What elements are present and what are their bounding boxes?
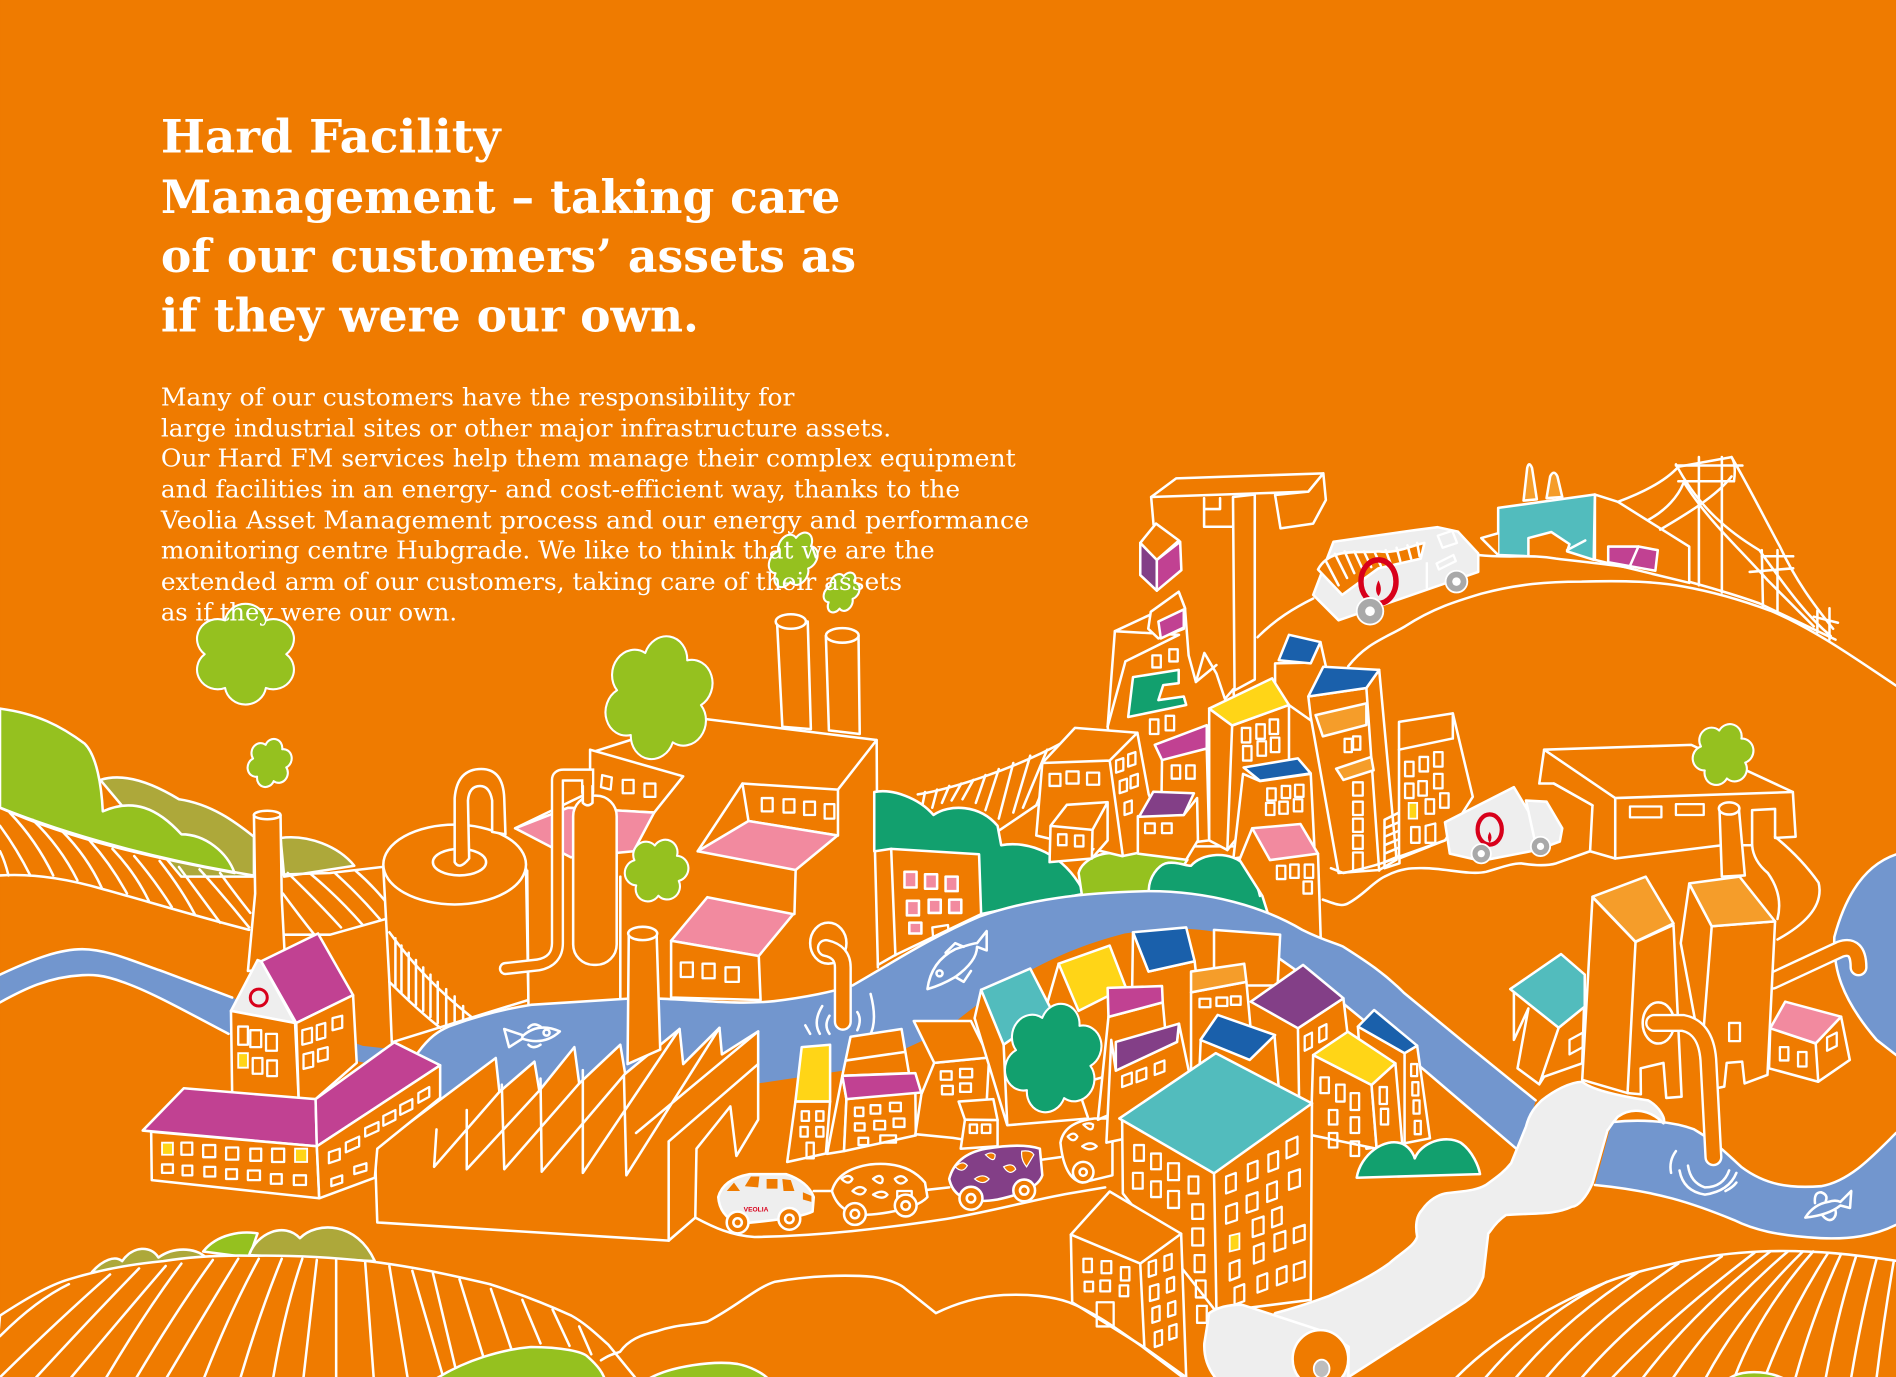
paper roll: [1204, 1305, 1349, 1377]
body text: as if they were our own.: [161, 598, 457, 626]
furrows: [0, 1259, 591, 1377]
yellow roof block: [1209, 705, 1289, 850]
heading: [161, 109, 856, 342]
small green bush: [1357, 1139, 1480, 1178]
light green bush: [1079, 846, 1187, 901]
left back hills: [0, 709, 354, 877]
lower right river: [1595, 1121, 1896, 1238]
left house: [1036, 728, 1170, 856]
heading: Management – taking care: [161, 170, 840, 224]
warehouse: [1539, 715, 1820, 940]
road along the cars: [695, 1157, 1105, 1237]
purple roof block: [1106, 1024, 1191, 1143]
truck tarp: [1318, 543, 1424, 595]
electricity pylons and cables: [1618, 457, 1838, 640]
body text: monitoring centre Hubgrade. We like to think that we are the: [161, 537, 935, 565]
magenta roof block: [1161, 748, 1209, 846]
main river: [418, 891, 1536, 1155]
yellow roof block: [1311, 1055, 1377, 1149]
logo: [250, 989, 267, 1006]
chimney in front of river: [628, 927, 660, 1064]
tall left block: [1108, 592, 1245, 846]
light orange block: [1191, 982, 1253, 1076]
heading: if they were our own.: [161, 288, 699, 342]
small house: [959, 1099, 998, 1149]
tower B: [1681, 884, 1775, 1091]
twin light orange towers: [1510, 877, 1859, 1195]
body text: large industrial sites or other major infrastructure assets.: [161, 415, 891, 443]
upper left river: [0, 949, 418, 1070]
cloud: [1686, 715, 1760, 794]
bottom left hill: [0, 1227, 641, 1377]
upper right hills: [1258, 555, 1896, 686]
truck logo: [1361, 560, 1396, 603]
dark green bush: [874, 791, 1085, 914]
pink roof house: [1239, 828, 1321, 940]
right block with ladder: [1385, 813, 1400, 868]
gable: [231, 960, 295, 1023]
body text: Our Hard FM services help them manage their complex equipment: [161, 445, 1016, 473]
top light orange building: [1214, 930, 1280, 985]
van wheels: [1472, 844, 1491, 863]
body text: extended arm of our customers, taking care of their assets: [161, 568, 902, 596]
process pipes and vessel: [505, 775, 620, 1004]
fish in river left: [504, 1024, 560, 1047]
roll end: [1293, 1330, 1348, 1377]
fish in river centre: [927, 931, 987, 989]
yellow narrow building: [795, 1045, 830, 1102]
body text: Many of our customers have the responsibility for: [161, 384, 795, 412]
cloud on the factory: [598, 628, 720, 768]
hedges: [92, 1249, 208, 1272]
green hill: [0, 709, 235, 873]
car: purple spotted: [949, 1146, 1042, 1210]
body text: Veolia Asset Management process and our energy and performance: [160, 506, 1029, 534]
walls: [231, 1011, 299, 1099]
blue roof block: [1131, 932, 1209, 1094]
body text: [160, 384, 1029, 626]
tower A: [1582, 897, 1682, 1098]
teal house: [1514, 989, 1584, 1084]
sawtooth factory: [375, 1028, 758, 1241]
back building cluster: [1036, 592, 1473, 940]
plant front: [1498, 495, 1595, 560]
narrow blue block: [1358, 1027, 1430, 1149]
roads near tower: [1323, 840, 1590, 905]
blue small tower: [1275, 642, 1326, 726]
heading: of our customers’ assets as: [161, 229, 856, 283]
left chimney: [197, 604, 296, 971]
teal roof block: [975, 990, 1088, 1125]
rolled-out white road: [1204, 1082, 1664, 1377]
delivery van: [1445, 787, 1562, 863]
far fields behind bushes: [918, 742, 1063, 831]
big purple block: [1298, 998, 1348, 1149]
pink window building: [875, 849, 981, 965]
right hook pipe: [1773, 948, 1859, 981]
car: Veolia white: [718, 1174, 814, 1233]
magenta roof building: [842, 1029, 909, 1076]
crane load: [1140, 524, 1181, 591]
plant side wall: [1595, 495, 1689, 583]
dark green bushes: [1149, 855, 1307, 937]
factory body: [593, 718, 878, 1006]
left block: [515, 750, 683, 828]
crane: [1140, 473, 1326, 690]
warehouse pipe: [1752, 837, 1820, 940]
car: partly hidden: [1060, 1118, 1112, 1183]
tall tower: [1308, 670, 1397, 873]
hill outline: [0, 1256, 641, 1377]
lower pink roof section: [671, 897, 793, 956]
plant magenta structure: [1608, 547, 1658, 571]
corner house with Veolia gable: [231, 933, 357, 1099]
factory chimneys: [777, 622, 860, 734]
teal plant on the hill: [1481, 464, 1689, 583]
tank stripes: [389, 932, 473, 1028]
yellow roof behind: [1047, 964, 1149, 1088]
blue roof block: [1233, 774, 1314, 859]
plant chimneys: [1524, 464, 1562, 501]
olive hills: [100, 777, 254, 877]
smoke puffs: [197, 604, 294, 705]
left striped field: [0, 808, 387, 935]
truck wheels: [1357, 598, 1383, 625]
body text: and facilities in an energy- and cost-efficient way, thanks to the: [161, 476, 960, 504]
tree: [998, 995, 1109, 1121]
storage tank: [383, 769, 528, 1042]
wheels: [727, 1212, 748, 1233]
car: orange spotted: [832, 1164, 927, 1225]
bottom middle hill outline: [601, 1276, 1183, 1377]
purple roof block: [1138, 798, 1198, 860]
bottom green mound: [437, 1347, 605, 1377]
right edge river: [1834, 854, 1896, 1057]
tall teal roof tower: [1119, 1053, 1312, 1323]
pink house: [1769, 1017, 1850, 1082]
large truck: [1313, 527, 1478, 625]
magenta roof block: [1098, 1002, 1170, 1120]
upper pink roof section: [742, 784, 838, 836]
warehouse chimney: [1719, 808, 1745, 877]
tower pipe: [1643, 1002, 1674, 1044]
bottom right hill: [1451, 1251, 1896, 1377]
long magenta building: [143, 1042, 440, 1198]
factory outlet pipe: [805, 923, 874, 1036]
roll core: [1314, 1360, 1329, 1377]
big factory: [515, 523, 878, 1006]
purple roof: [261, 933, 353, 1023]
fish in river right: [1805, 1191, 1851, 1220]
van logo: [1478, 814, 1502, 845]
heading: Hard Facility: [161, 109, 502, 163]
central buildings: [787, 927, 1480, 1178]
orange roof house: [915, 1058, 989, 1143]
front small building: [1071, 1192, 1186, 1377]
car logo: VEOLIA: [744, 1207, 769, 1214]
bushes behind the river: [874, 791, 1187, 914]
dark blue roof: [1197, 1035, 1282, 1125]
